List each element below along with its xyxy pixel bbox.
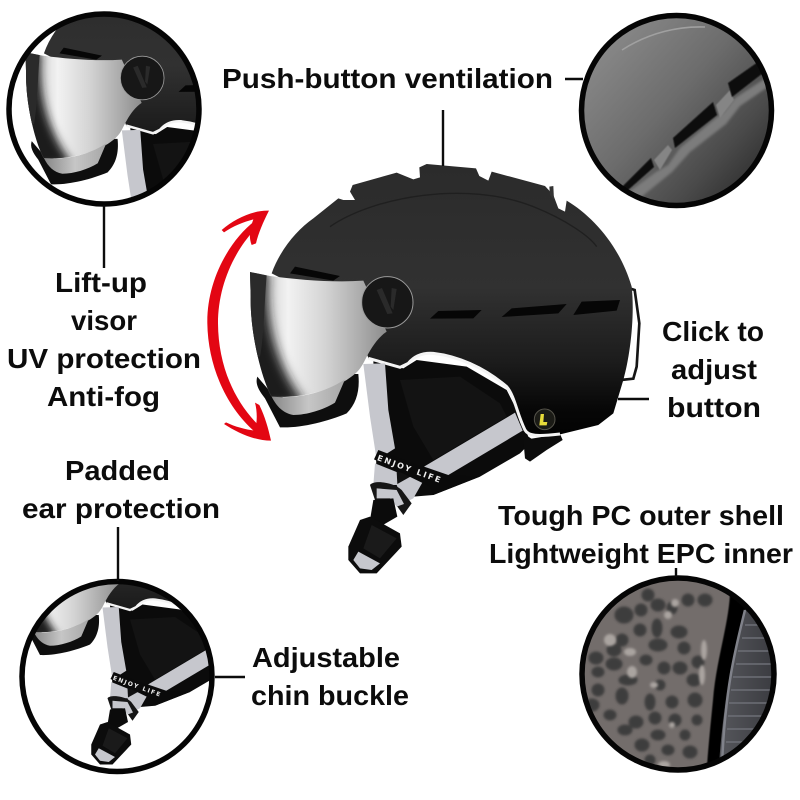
label: click to adjust button (662, 316, 764, 423)
ribbon: enjoy life (374, 450, 480, 495)
rear strap (424, 413, 523, 475)
ribbon: enjoy life: ENJOY LIFE (376, 453, 442, 485)
connector lines (104, 79, 676, 677)
icon: helmet (240, 164, 639, 573)
label: click to adjust button: adjust (671, 354, 757, 385)
visor pivot button (362, 277, 413, 328)
rear adjust wire (621, 287, 639, 380)
label: shell construction: Tough PC outer shell (498, 500, 784, 531)
label: click to adjust button: button (667, 392, 761, 423)
front strap (363, 363, 395, 460)
label: padded ear protection (22, 455, 220, 524)
label: adjustable chin buckle: chin buckle (251, 680, 409, 711)
chin pad (373, 360, 533, 497)
lens lower strip (272, 379, 345, 415)
rear tab (523, 434, 563, 462)
label: lift-up visor: Anti-fog (47, 381, 160, 412)
yellow L badge (534, 409, 555, 430)
label: lift-up visor: UV protection (7, 343, 201, 374)
inset: lift-up visor (6, 11, 202, 207)
ribbed liner (720, 609, 772, 758)
label: adjustable chin buckle (251, 642, 409, 711)
foam cells (586, 590, 711, 764)
visor lower frame (257, 374, 359, 427)
label: lift-up visor: Lift-up (55, 267, 147, 298)
buckle (348, 482, 412, 573)
shell (272, 164, 633, 437)
black seam (706, 596, 746, 762)
side vents (290, 267, 620, 319)
label: click to adjust button: Click to (662, 316, 764, 347)
inset: ventilation detail (575, 10, 780, 210)
trim (368, 353, 560, 435)
inset: chin buckle and ear pad (19, 578, 215, 774)
lower straps (373, 463, 427, 503)
label: push-button ventilation: Push-button ventilation (222, 63, 553, 94)
label: lift-up visor (7, 267, 201, 412)
label: padded ear protection: ear protection (22, 493, 220, 524)
label: shell construction (489, 500, 793, 569)
label: shell construction: Lightweight EPC inner (489, 538, 793, 569)
label: padded ear protection: Padded (65, 455, 170, 486)
visor lens (240, 263, 387, 410)
inset: shell cross-section (579, 575, 777, 773)
label: lift-up visor: visor (71, 305, 137, 336)
arrow: visor lift (207, 211, 271, 441)
label: adjustable chin buckle: Adjustable (252, 642, 400, 673)
